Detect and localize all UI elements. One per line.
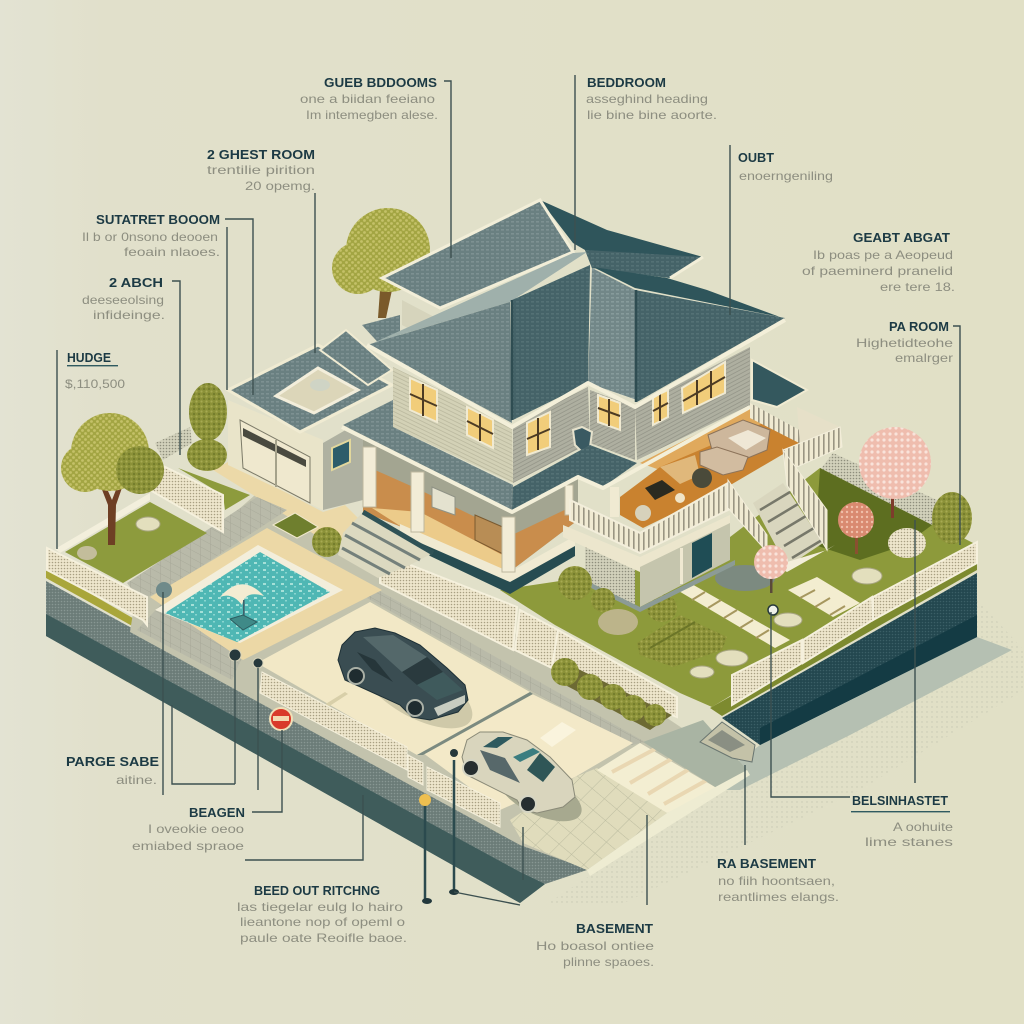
garage roof	[228, 345, 392, 432]
callout: geabt abgat	[802, 230, 955, 294]
deck room	[570, 403, 842, 553]
callout: sutatret room: Il b or 0nsono deooen	[82, 230, 218, 244]
callout: ra basement	[717, 856, 839, 904]
callout: guest room: 20 opemg.	[245, 179, 315, 193]
callout: parge sabe: aitine.	[116, 773, 157, 787]
callout: pa room: Highetidteohe	[856, 336, 953, 350]
callout: beed out ritchng: paule oate Reoifle baoe.	[240, 931, 407, 945]
pool	[150, 528, 382, 660]
grey paving left	[127, 497, 287, 600]
silver car	[462, 732, 589, 832]
callout: belsinhastet: lime stanes	[865, 835, 953, 849]
back rails	[750, 403, 842, 470]
callout: bedroom: asseghind heading	[586, 92, 708, 106]
callout: beed out ritchng: BEED OUT RITCHNG	[254, 883, 380, 898]
callout: guest room: 2 GHEST ROOM	[207, 147, 315, 162]
stepping stone path	[677, 577, 860, 648]
callout: bedroom: lie bine bine aoorte.	[587, 108, 717, 122]
callout: geabt abgat: of paeminerd pranelid	[802, 264, 953, 278]
callout: pa room: emalrger	[895, 351, 953, 365]
back small lawn	[178, 468, 250, 510]
callout: arch	[82, 275, 165, 322]
callout: guest bedrooms	[300, 75, 438, 122]
porch columns	[363, 447, 573, 572]
callout: sutatret room: SUTATRET BOOOM	[96, 212, 220, 227]
lower floor	[563, 515, 735, 612]
base platform walls	[46, 558, 977, 903]
callout: guest room: trentilie pirition	[207, 163, 315, 177]
callout: pa room	[856, 319, 953, 365]
lamp posts	[156, 582, 778, 904]
callout: bedroom: BEDDROOM	[587, 75, 666, 90]
dark car	[338, 628, 483, 743]
porch slab	[400, 530, 575, 594]
callout: beagen	[132, 805, 245, 853]
callout: guest bedrooms: GUEB BDDOOMS	[324, 75, 437, 90]
ground surfaces	[65, 462, 745, 870]
callout: beed out ritchng	[237, 883, 407, 945]
porch bench	[475, 515, 505, 555]
grey paving along driveway	[367, 590, 645, 745]
small utility box	[700, 722, 755, 762]
wall unit	[573, 427, 592, 452]
plant bed	[273, 513, 342, 557]
callout: beed out ritchng: lieantone nop of opeml o	[240, 915, 405, 929]
furniture	[635, 420, 770, 521]
driveways	[257, 602, 750, 876]
left lawn	[65, 502, 207, 583]
rear tree	[332, 208, 430, 318]
base plate	[130, 495, 745, 870]
callout: geabt abgat: GEABT ABGAT	[853, 230, 950, 245]
porch	[338, 427, 578, 594]
callout: ra basement: no fiih hoontsaen,	[718, 874, 835, 888]
callout: geabt abgat: ere tere 18.	[880, 280, 955, 294]
callout: oubt	[738, 150, 833, 183]
door	[692, 533, 712, 578]
callout: belsinhastet: A oohuite	[893, 820, 953, 834]
callout: house price	[65, 350, 125, 391]
deck railing	[570, 483, 728, 553]
callout: oubt: enoerngeniling	[739, 169, 833, 183]
callout: sutatret room	[82, 212, 220, 259]
right-side trees and bushes	[838, 427, 972, 558]
callout: beagen: I oveokie oeoo	[148, 822, 244, 836]
foreground shrubs by house	[558, 566, 615, 612]
upper floor walls	[393, 347, 750, 483]
rear roof	[382, 200, 703, 308]
callout: beagen: BEAGEN	[189, 805, 245, 820]
main roof	[367, 252, 785, 427]
hot tub	[276, 368, 358, 413]
hedge	[637, 615, 727, 667]
icon: umbrella and table	[220, 584, 264, 630]
callout: geabt abgat: Ib poas pe a Aeopeud	[813, 248, 953, 262]
callout: sutatret room: feoain nlaoes.	[124, 245, 220, 259]
callout: belsinhastet	[851, 793, 953, 849]
fences	[47, 427, 977, 827]
callout: guest room	[207, 147, 315, 193]
callout: arch: infideinge.	[93, 308, 165, 322]
garage door	[240, 420, 310, 503]
pink shrub by stairs	[754, 545, 788, 593]
planter shrubs along fence	[551, 658, 672, 730]
windows	[410, 362, 725, 455]
callout: ra basement: RA BASEMENT	[717, 856, 816, 871]
garage apron	[213, 462, 400, 560]
stones	[690, 568, 882, 678]
callout: parge sabe: PARGE SABE	[66, 754, 159, 769]
porch table box	[432, 487, 455, 515]
callout: beagen: emiabed spraoe	[132, 839, 244, 853]
callout: basement: Ho boasol ontiee	[536, 939, 654, 953]
right lawn	[500, 453, 977, 707]
upper floor back wing	[402, 300, 807, 407]
callout: belsinhastet: BELSINHASTET	[852, 793, 948, 808]
leader lines	[57, 75, 960, 905]
callout: parge sabe	[66, 754, 159, 787]
callout: pa room: PA ROOM	[889, 319, 949, 334]
callout: house price: HUDGE	[67, 350, 111, 365]
porch steps	[338, 512, 433, 578]
callout: guest bedrooms: one a biidan feeiano	[300, 92, 435, 106]
callout: basement: BASEMENT	[576, 921, 653, 936]
callout: arch: deeseeolsing	[82, 293, 164, 307]
lower porch roof	[342, 400, 750, 512]
patio circle	[715, 565, 775, 591]
callout: guest bedrooms: Im intemegben alese.	[306, 108, 438, 122]
callout: house price: $,110,500	[65, 377, 125, 391]
cars	[338, 628, 589, 832]
grey paving lower left	[137, 600, 243, 680]
paving and crosswalk	[510, 768, 667, 870]
left tree and bushes	[61, 383, 227, 560]
callout: basement: plinne spaoes.	[563, 955, 654, 969]
ground shadow	[545, 600, 1024, 905]
icon: stop sign	[270, 708, 292, 730]
callout: beed out ritchng: las tiegelar eulg lo hairo	[237, 900, 403, 914]
callout: bedroom	[586, 75, 717, 122]
callout: arch: 2 ABCH	[109, 275, 163, 290]
garage wing	[228, 315, 400, 510]
garage window	[332, 440, 350, 470]
callout: basement	[536, 921, 654, 969]
callout: oubt: OUBT	[738, 150, 774, 165]
exterior stairs	[728, 450, 835, 572]
callout: ra basement: reantlimes elangs.	[718, 890, 839, 904]
